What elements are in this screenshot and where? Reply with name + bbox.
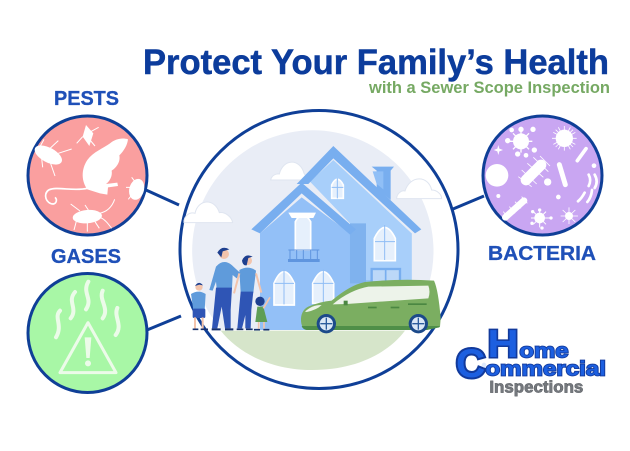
girl xyxy=(254,297,270,330)
small star xyxy=(494,145,503,155)
heading: pests: PESTS xyxy=(54,88,119,110)
boy xyxy=(191,283,208,329)
virus with knobs xyxy=(505,127,537,158)
windows xyxy=(274,179,395,305)
cockroach bottom xyxy=(71,199,115,232)
rat xyxy=(46,139,128,204)
logo: Home Commercial Inspections: H xyxy=(487,322,519,366)
connector lines xyxy=(146,190,484,330)
fly top xyxy=(77,125,99,146)
logo: Home Commercial Inspections: Inspections xyxy=(489,377,583,396)
icon: fumes and warning triangle xyxy=(56,282,119,373)
panel: gases circle xyxy=(28,274,147,392)
icon: family xyxy=(191,248,270,330)
logo: Home Commercial Inspections: ome xyxy=(519,340,569,363)
backdrop circle xyxy=(192,130,433,330)
ground xyxy=(221,331,405,370)
icon: car xyxy=(301,280,441,333)
heading: bacteria: BACTERIA xyxy=(488,243,596,265)
scene illustration xyxy=(184,130,442,370)
round cell left xyxy=(486,164,508,187)
icons: rat and insects xyxy=(32,125,147,232)
mother xyxy=(234,255,261,329)
title: Protect Your Family’s Health xyxy=(143,43,609,82)
small spiky star xyxy=(561,207,578,224)
subtitle: with a Sewer Scope Inspection xyxy=(368,79,610,97)
logo: Home Commercial Inspections: C xyxy=(456,342,485,386)
spiky sphere xyxy=(552,126,577,151)
panel: central house scene xyxy=(180,110,458,388)
cockroach upper left xyxy=(32,139,72,176)
small virus xyxy=(530,208,553,230)
father xyxy=(209,248,241,329)
rod bacterium lower xyxy=(503,197,527,218)
icon: clouds xyxy=(184,162,442,223)
icons: microbes xyxy=(486,126,597,230)
rod bacterium centre xyxy=(518,156,550,187)
panel: pests circle xyxy=(28,116,147,235)
logo: Home Commercial Inspections: ommercial xyxy=(485,358,606,381)
heading: gases: GASES xyxy=(51,246,121,268)
curved bacteria xyxy=(578,175,597,202)
balcony xyxy=(288,213,316,218)
logo: Home Commercial Inspections xyxy=(456,322,606,396)
fly right xyxy=(126,177,147,202)
icon: house xyxy=(251,146,421,330)
panel: bacteria circle xyxy=(483,116,602,235)
capsules xyxy=(577,149,586,161)
